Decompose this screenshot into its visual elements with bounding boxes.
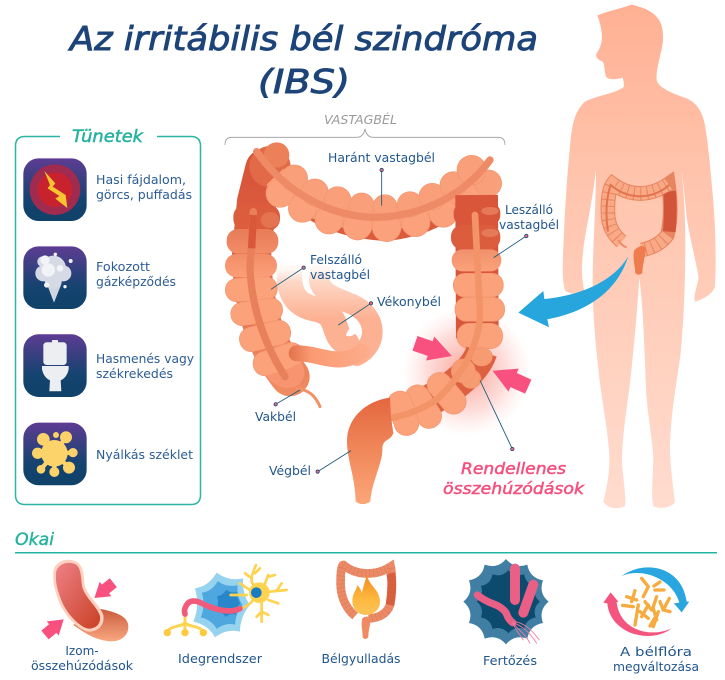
caption: muscle contractions (31, 644, 133, 673)
symptom text: toilet (96, 352, 194, 381)
caption: infection: Fertőzés (483, 654, 537, 668)
label: rectum: Végbél (269, 464, 311, 478)
caption: gut flora change: megváltozása (613, 660, 699, 674)
caption: gut flora change (613, 645, 699, 674)
symptom text: pain: görcs, puffadás (96, 188, 192, 202)
panel: symptoms (16, 127, 200, 504)
symptom text: gas (96, 260, 176, 289)
icon: mucus (23, 423, 87, 485)
caption: bowel inflammation: Bélgyulladás (322, 652, 400, 666)
title: Az irritábilis bél szindróma (68, 19, 538, 58)
label: descending colon: vastagbél (499, 218, 559, 232)
label: transverse colon: Haránt vastagbél (328, 151, 435, 165)
symptom text: pain: Hasi fájdalom, (96, 173, 186, 187)
label: ascending colon: vastagbél (310, 268, 370, 282)
title (68, 19, 538, 101)
icon: abdominal pain (23, 158, 87, 221)
leader lines (271, 170, 526, 472)
symptom text: pain (96, 173, 192, 202)
icon: gas (23, 246, 87, 309)
label: abnormal contractions (443, 459, 585, 498)
symptom text: toilet: székrekedés (96, 367, 173, 381)
label: ascending colon: Felszálló (310, 253, 362, 267)
body colon (small) (606, 184, 670, 250)
small intestine (290, 268, 372, 360)
icon: nervous system (164, 565, 287, 637)
icon: gut flora change (603, 567, 689, 636)
inflammation glow (402, 307, 532, 437)
blue arrow (518, 256, 628, 327)
symptom text: toilet: Hasmenés vagy (96, 352, 194, 366)
panel heading: Tünetek: Tünetek (72, 127, 144, 147)
icon: infection (463, 559, 549, 644)
colon anatomy diagram (225, 129, 533, 504)
label: abnormal contractions: Rendellenes (461, 459, 566, 478)
caption: nervous system: Idegrendszer (178, 652, 262, 666)
symptom text: gas: gázképződés (96, 275, 176, 289)
symptom text: mucus: Nyálkás széklet (96, 448, 193, 462)
contraction arrow right (487, 359, 533, 398)
label: small intestine: Vékonybél (377, 295, 441, 309)
human body silhouette (563, 5, 716, 508)
transverse colon (257, 152, 502, 242)
icon: bowel inflammation (341, 565, 392, 639)
label: vastagbél heading: VASTAGBÉL (324, 112, 397, 127)
ascending colon (225, 142, 320, 407)
symptom text: gas: Fokozott (96, 260, 150, 274)
label: descending colon: Leszálló (505, 203, 553, 217)
label: appendix: Vakbél (255, 410, 296, 424)
section heading: Okai: Okai (15, 530, 54, 550)
leader dots (274, 168, 528, 473)
icon: muscle contractions (39, 560, 128, 642)
label: ascending colon (310, 253, 370, 282)
caption: muscle contractions: összehúzódások (31, 659, 133, 673)
title: (IBS) (258, 62, 350, 101)
label: descending colon (499, 203, 559, 232)
rectum (347, 398, 393, 504)
vastagbél brace (225, 129, 505, 145)
icon: toilet (23, 334, 87, 397)
caption: muscle contractions: Izom- (65, 644, 99, 658)
label: abnormal contractions: összehúzódások (443, 479, 585, 498)
descending colon (385, 195, 505, 439)
appendix (297, 388, 320, 407)
contraction arrow left (411, 331, 456, 368)
caption: gut flora change: A bélflóra (620, 645, 692, 659)
